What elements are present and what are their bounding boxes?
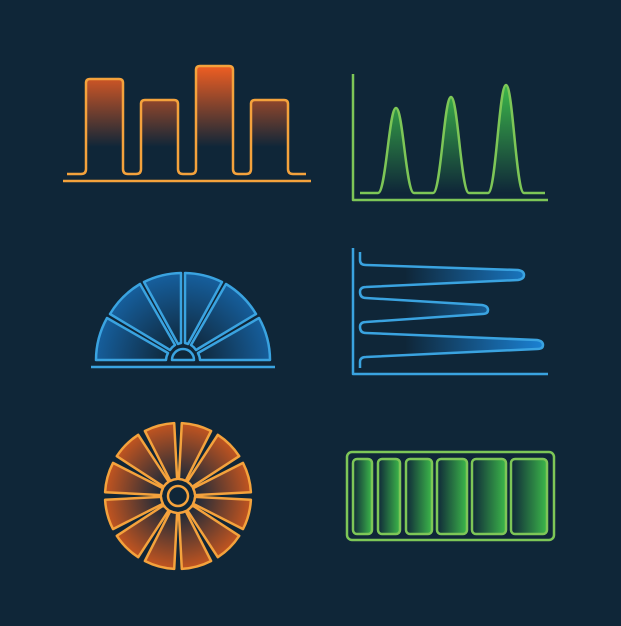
bar chart: orange bbox=[63, 66, 311, 181]
pie chart: orange wheel bbox=[105, 423, 251, 569]
half pie chart: blue bbox=[91, 273, 275, 367]
line chart: green peaks bbox=[353, 74, 548, 200]
horizontal bar chart: blue spikes bbox=[353, 248, 548, 374]
battery chart: green cells bbox=[347, 452, 554, 540]
